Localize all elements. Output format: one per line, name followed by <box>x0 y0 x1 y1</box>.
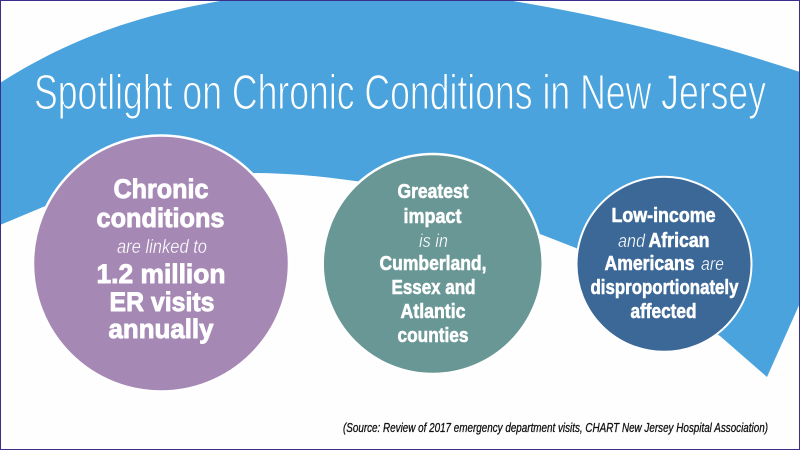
text: Americans: Americans <box>604 253 694 275</box>
text: affected: affected <box>630 301 696 323</box>
text: is in: is in <box>419 231 448 251</box>
text: Chronic: Chronic <box>114 174 208 204</box>
panel: ER visits circle <box>33 136 289 392</box>
text: African: African <box>648 230 710 252</box>
text: are: are <box>701 254 724 274</box>
text: annually: annually <box>108 314 214 344</box>
text: 1.2 million: 1.2 million <box>96 259 226 289</box>
text: Atlantic: Atlantic <box>400 301 466 323</box>
text: are linked to: are linked to <box>117 237 207 258</box>
text: Essex and: Essex and <box>392 277 476 299</box>
text: Greatest: Greatest <box>398 181 469 203</box>
text: Low-income: Low-income <box>612 205 716 227</box>
text: Cumberland,: Cumberland, <box>380 253 486 275</box>
text: impact: impact <box>404 206 462 228</box>
text: counties: counties <box>398 325 468 347</box>
panel: disproportionately affected circle <box>576 177 752 352</box>
text: and: and <box>618 231 646 251</box>
text: ER visits: ER visits <box>110 287 214 317</box>
text: conditions: conditions <box>96 203 224 233</box>
text: disproportionately: disproportionately <box>590 277 739 299</box>
panel: greatest impact circle <box>323 154 543 374</box>
